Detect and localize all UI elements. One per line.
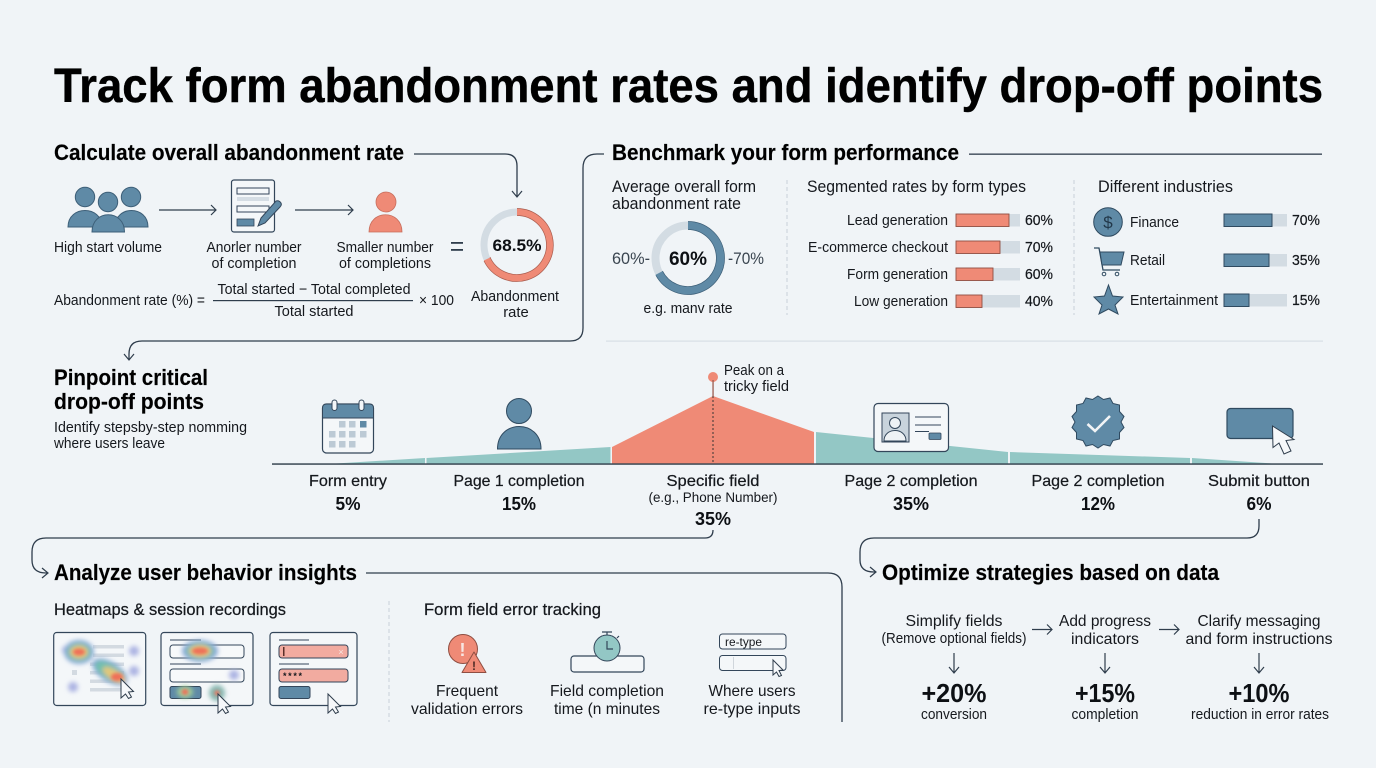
label: page 2 completion second bbox=[1032, 473, 1164, 514]
marker: peak pin bbox=[708, 372, 718, 396]
heatmap card: page bbox=[54, 632, 146, 706]
arrow: step two bbox=[295, 205, 353, 215]
label: submit button: Submit button bbox=[1208, 473, 1310, 490]
heading: analyze: Analyze user behavior insights bbox=[54, 560, 357, 585]
text: field completion time: Field completion bbox=[550, 683, 664, 700]
label: page 1 completion: Page 1 completion bbox=[454, 473, 584, 490]
text: field completion time: time (n minutes bbox=[554, 701, 660, 718]
bar: form generation: Form generation bbox=[847, 267, 948, 283]
text: frequent validation errors bbox=[411, 683, 523, 718]
heading: calculate: Calculate overall abandonment rate bbox=[54, 140, 404, 165]
heading rule bbox=[969, 154, 1322, 155]
strategy: add progress indicators: Add progress bbox=[1059, 613, 1151, 630]
icon: id card bbox=[874, 404, 948, 452]
heading rule bbox=[366, 573, 842, 722]
label: submit button: 6% bbox=[1246, 493, 1272, 514]
text: pinpoint description: Identify stepsby-step nomming bbox=[54, 420, 247, 436]
strategy: clarify messaging: and form instructions bbox=[1186, 631, 1332, 648]
icon: stopwatch on field bbox=[571, 632, 644, 672]
text: field completion time bbox=[550, 683, 664, 718]
heatmap card: field errors bbox=[270, 632, 357, 714]
text: frequent validation errors: Frequent bbox=[436, 683, 499, 700]
text: segmented rates: Segmented rates by form types bbox=[807, 178, 1026, 196]
formula: Total started bbox=[274, 304, 354, 320]
icon: submit button with cursor bbox=[1227, 408, 1294, 454]
icon: re-type fields bbox=[720, 634, 786, 676]
text: 60%-: 60%- bbox=[612, 250, 650, 268]
text: where users re-type bbox=[704, 683, 800, 718]
text: of completions: of completions bbox=[339, 256, 431, 272]
bar: e-commerce checkout: E-commerce checkout bbox=[808, 240, 948, 256]
label: page 2 completion: 35% bbox=[893, 493, 929, 514]
strategy: clarify messaging: Clarify messaging bbox=[1198, 613, 1320, 630]
text: abandonment: Abandonment bbox=[471, 289, 559, 305]
text: pinpoint description: where users leave bbox=[53, 436, 165, 452]
label: submit button bbox=[1208, 473, 1310, 514]
icon: single person bbox=[369, 192, 402, 232]
label: specific field: Specific field bbox=[666, 473, 760, 490]
text: peak note: Peak on a bbox=[724, 363, 785, 379]
label: specific field bbox=[648, 473, 778, 529]
formula: Total started − Total completed bbox=[218, 282, 410, 298]
arrow: heading to donut bbox=[414, 154, 522, 197]
bar: retail: 35% bbox=[1292, 253, 1320, 269]
bar: low generation: 40% bbox=[1025, 294, 1053, 310]
arrow: messaging result bbox=[1254, 653, 1264, 673]
arrow: submit button to optimize bbox=[860, 519, 1259, 577]
subheading: form field error tracking: Form field error tracking bbox=[424, 601, 601, 619]
text: e.g. many rate: e.g. manv rate bbox=[644, 301, 732, 317]
strategy: add progress indicators bbox=[1059, 613, 1151, 648]
text: frequent validation errors: validation errors bbox=[411, 701, 523, 718]
chart: drop-off funnel bbox=[272, 396, 1323, 465]
bar: entertainment bbox=[1130, 293, 1320, 309]
arrow: calculate to pinpoint bbox=[124, 154, 604, 360]
donut: 68.5% bbox=[484, 208, 553, 281]
panel: optimize strategies based on data bbox=[882, 560, 1332, 723]
bar: lead generation: Lead generation bbox=[847, 213, 948, 229]
heatmap card: field errors: **** bbox=[283, 671, 302, 681]
bar: lead generation bbox=[847, 213, 1053, 229]
donut: 68.5%: 68.5% bbox=[492, 236, 542, 255]
heatmap card: form fields bbox=[161, 632, 253, 714]
stat: +15% completion bbox=[1072, 678, 1138, 723]
arrow: step one bbox=[159, 205, 216, 215]
icon: equals bbox=[451, 242, 463, 251]
heading: optimize: Optimize strategies based on data bbox=[882, 560, 1219, 585]
bar: low generation: Low generation bbox=[854, 294, 948, 310]
text: peak note: tricky field bbox=[724, 379, 789, 395]
bar: retail bbox=[1130, 253, 1320, 269]
text: rate: rate bbox=[503, 305, 529, 321]
stat: +20% conversion: +20% bbox=[922, 678, 986, 708]
bar: retail: Retail bbox=[1130, 253, 1165, 269]
text: where users re-type: re-type inputs bbox=[704, 701, 800, 718]
icon: validation errors: ! bbox=[472, 659, 476, 673]
stat: +20% conversion bbox=[921, 678, 987, 723]
arrow: simplify result bbox=[949, 653, 959, 673]
strategy: add progress indicators: indicators bbox=[1071, 631, 1139, 648]
label: page 2 completion second: 12% bbox=[1081, 493, 1115, 514]
arrow: specific field to analyze bbox=[32, 530, 713, 578]
donut: 60%: 60% bbox=[669, 248, 707, 270]
strategy: simplify fields bbox=[882, 613, 1026, 647]
bar: finance bbox=[1130, 213, 1320, 231]
label: specific field: (e.g., Phone Number) bbox=[648, 489, 778, 505]
bar: entertainment: 15% bbox=[1292, 293, 1320, 309]
heading: pinpoint: Pinpoint critical bbox=[54, 365, 208, 390]
icon: dollar coin bbox=[1094, 208, 1122, 236]
panel: benchmark your form performance bbox=[612, 140, 1322, 317]
formula: Abandonment rate (%) = bbox=[54, 293, 205, 309]
bar: finance: 70% bbox=[1292, 213, 1320, 229]
icon: calendar bbox=[322, 400, 374, 453]
title: Track form abandonment rates and identify drop-off points bbox=[54, 60, 1323, 113]
strategy: clarify messaging bbox=[1186, 613, 1332, 648]
text: another number of completion: Anorler number bbox=[206, 240, 302, 256]
divider bbox=[787, 180, 1074, 315]
bar: form generation bbox=[847, 267, 1053, 283]
heading: benchmark: Benchmark your form performance bbox=[612, 140, 959, 165]
text: pinpoint description bbox=[53, 420, 247, 452]
panel: calculate overall abandonment rate bbox=[54, 140, 559, 321]
formula: × 100 bbox=[419, 293, 454, 309]
icon: star bbox=[1094, 285, 1123, 314]
panel: pinpoint critical drop-off points bbox=[53, 363, 1323, 529]
bar: e-commerce checkout: 70% bbox=[1025, 240, 1053, 256]
label: page 1 completion: 15% bbox=[502, 493, 536, 514]
label: form entry: Form entry bbox=[309, 473, 387, 490]
label: page 1 completion bbox=[454, 473, 584, 514]
strategy: simplify fields: (Remove optional fields) bbox=[882, 631, 1026, 647]
subheading: heatmaps: Heatmaps & session recordings bbox=[54, 601, 286, 619]
stat: +15% completion: +15% bbox=[1075, 678, 1135, 708]
text: high start volume: High start volume bbox=[54, 240, 162, 256]
arrow: simplify to progress bbox=[1032, 624, 1052, 634]
stat: +15% completion: completion bbox=[1072, 707, 1138, 723]
text: smaller number: Smaller number bbox=[336, 240, 434, 256]
bar chart: form types bbox=[808, 213, 1053, 310]
text: of completion: of completion bbox=[212, 256, 296, 272]
stat: +10% reduction bbox=[1191, 678, 1329, 723]
heading: pinpoint: drop-off points bbox=[54, 389, 204, 414]
text: different industries: Different industries bbox=[1098, 178, 1233, 196]
icon: re-type fields: re-type bbox=[725, 637, 762, 649]
bar: finance: Finance bbox=[1130, 215, 1179, 231]
bar: lead generation: 60% bbox=[1025, 213, 1053, 229]
text: average overall form: Average overall form bbox=[612, 178, 756, 196]
icon: validation errors: ! bbox=[460, 640, 466, 660]
heading: pinpoint bbox=[54, 365, 208, 414]
formula bbox=[54, 282, 454, 320]
text: where users re-type: Where users bbox=[708, 683, 796, 700]
arrow: progress result bbox=[1100, 653, 1110, 673]
label: form entry: 5% bbox=[336, 493, 360, 514]
icon: verified badge bbox=[1072, 396, 1124, 448]
label: page 2 completion second: Page 2 completion bbox=[1032, 473, 1164, 490]
text: abandonment rate: abandonment rate bbox=[612, 195, 741, 213]
icon: form document with pen bbox=[232, 180, 281, 232]
icon: person bbox=[498, 398, 541, 449]
stat: +20% conversion: conversion bbox=[921, 707, 987, 723]
bar: e-commerce checkout bbox=[808, 240, 1053, 256]
label: form entry bbox=[309, 473, 387, 514]
donut: 60% bbox=[656, 222, 725, 294]
stat: +10% reduction: reduction in error rates bbox=[1191, 707, 1329, 723]
stat: +10% reduction: +10% bbox=[1228, 678, 1290, 708]
bar chart: industries bbox=[1130, 213, 1320, 309]
bar: form generation: 60% bbox=[1025, 267, 1053, 283]
icon: shopping cart bbox=[1094, 248, 1124, 276]
label: page 2 completion: Page 2 completion bbox=[844, 473, 978, 490]
icon: group of people bbox=[68, 187, 148, 232]
arrow: progress to messaging bbox=[1159, 624, 1179, 634]
label: page 2 completion bbox=[844, 473, 978, 514]
bar: low generation bbox=[854, 294, 1053, 310]
label: specific field: 35% bbox=[695, 508, 731, 529]
icon: dollar coin: $ bbox=[1103, 213, 1113, 232]
text: -70%: -70% bbox=[728, 250, 764, 268]
panel: analyze user behavior insights bbox=[54, 560, 842, 722]
bar: entertainment: Entertainment bbox=[1130, 293, 1218, 309]
icon: validation errors bbox=[448, 634, 486, 673]
text: peak note bbox=[724, 363, 789, 395]
strategy: simplify fields: Simplify fields bbox=[906, 613, 1002, 630]
heatmap card: field errors: × bbox=[338, 647, 344, 657]
